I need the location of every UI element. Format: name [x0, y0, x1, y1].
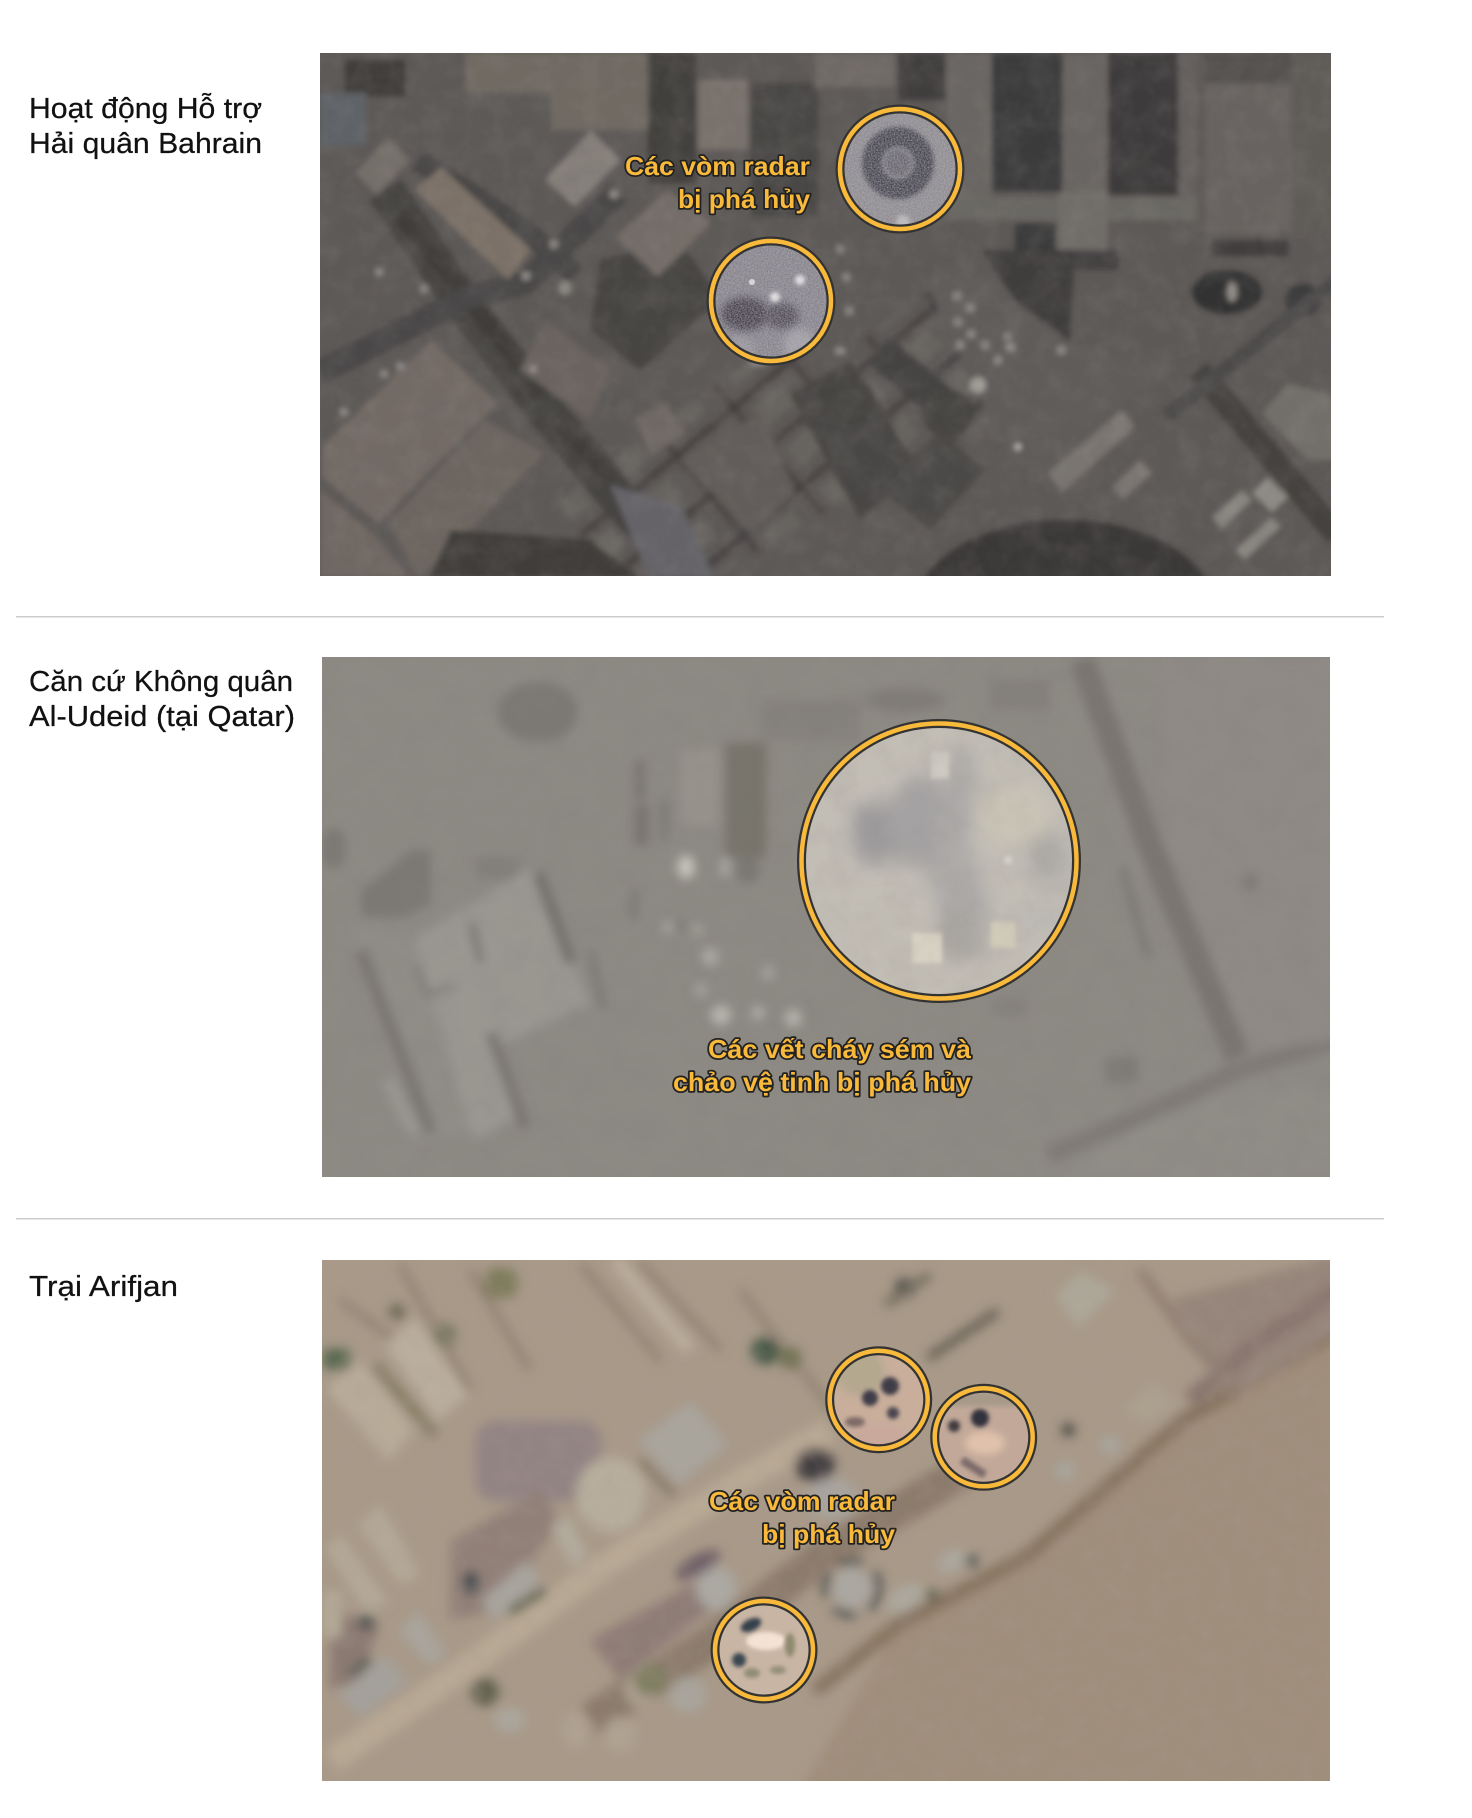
- satellite image: Arifjan: [322, 1255, 1340, 1790]
- satellite image: Bahrain: [320, 53, 1331, 576]
- heading: Bahrain: Hoạt động Hỗ trợ: [29, 92, 262, 125]
- highlight circle: radar dome B: [934, 1387, 1034, 1487]
- highlight circle: radar dome C: [714, 1600, 814, 1700]
- heading: Al-Udeid: Al-Udeid (tại Qatar): [29, 701, 295, 733]
- panel: Bahrain naval support activity: [31, 53, 1331, 576]
- callout label: destroyed radar domes: [709, 1486, 896, 1549]
- highlight circle: scorched area: [800, 722, 1078, 1000]
- callout label: destroyed radar domes: [625, 151, 811, 214]
- satellite image: Al-Udeid: [320, 657, 1340, 1180]
- panel: Camp Arifjan: [29, 1255, 1340, 1790]
- callout label: destroyed radar domes: bị phá hủy: [678, 184, 811, 214]
- heading: Bahrain: Hải quân Bahrain: [29, 128, 262, 160]
- callout label: scorch marks and destroyed satellite dishes: Các vết cháy sém và: [708, 1034, 972, 1064]
- callout label: destroyed radar domes: Các vòm radar: [625, 151, 810, 181]
- highlight circle: radar dome 1: [840, 109, 960, 230]
- panel: Al-Udeid air base: [29, 657, 1340, 1180]
- callout label: scorch marks and destroyed satellite dishes: [673, 1034, 972, 1097]
- callout label: destroyed radar domes: Các vòm radar: [709, 1486, 895, 1516]
- callout label: scorch marks and destroyed satellite dishes: chảo vệ tinh bị phá hủy: [673, 1067, 972, 1097]
- heading: Al-Udeid: [29, 666, 295, 733]
- highlight circle: radar dome A: [829, 1348, 929, 1452]
- callout label: destroyed radar domes: bị phá hủy: [762, 1519, 896, 1549]
- heading: Al-Udeid: Căn cứ Không quân: [29, 666, 293, 698]
- highlight circle: radar dome 2: [711, 241, 831, 364]
- heading: Arifjan: Trại Arifjan: [29, 1271, 178, 1303]
- heading: Bahrain: [29, 92, 262, 160]
